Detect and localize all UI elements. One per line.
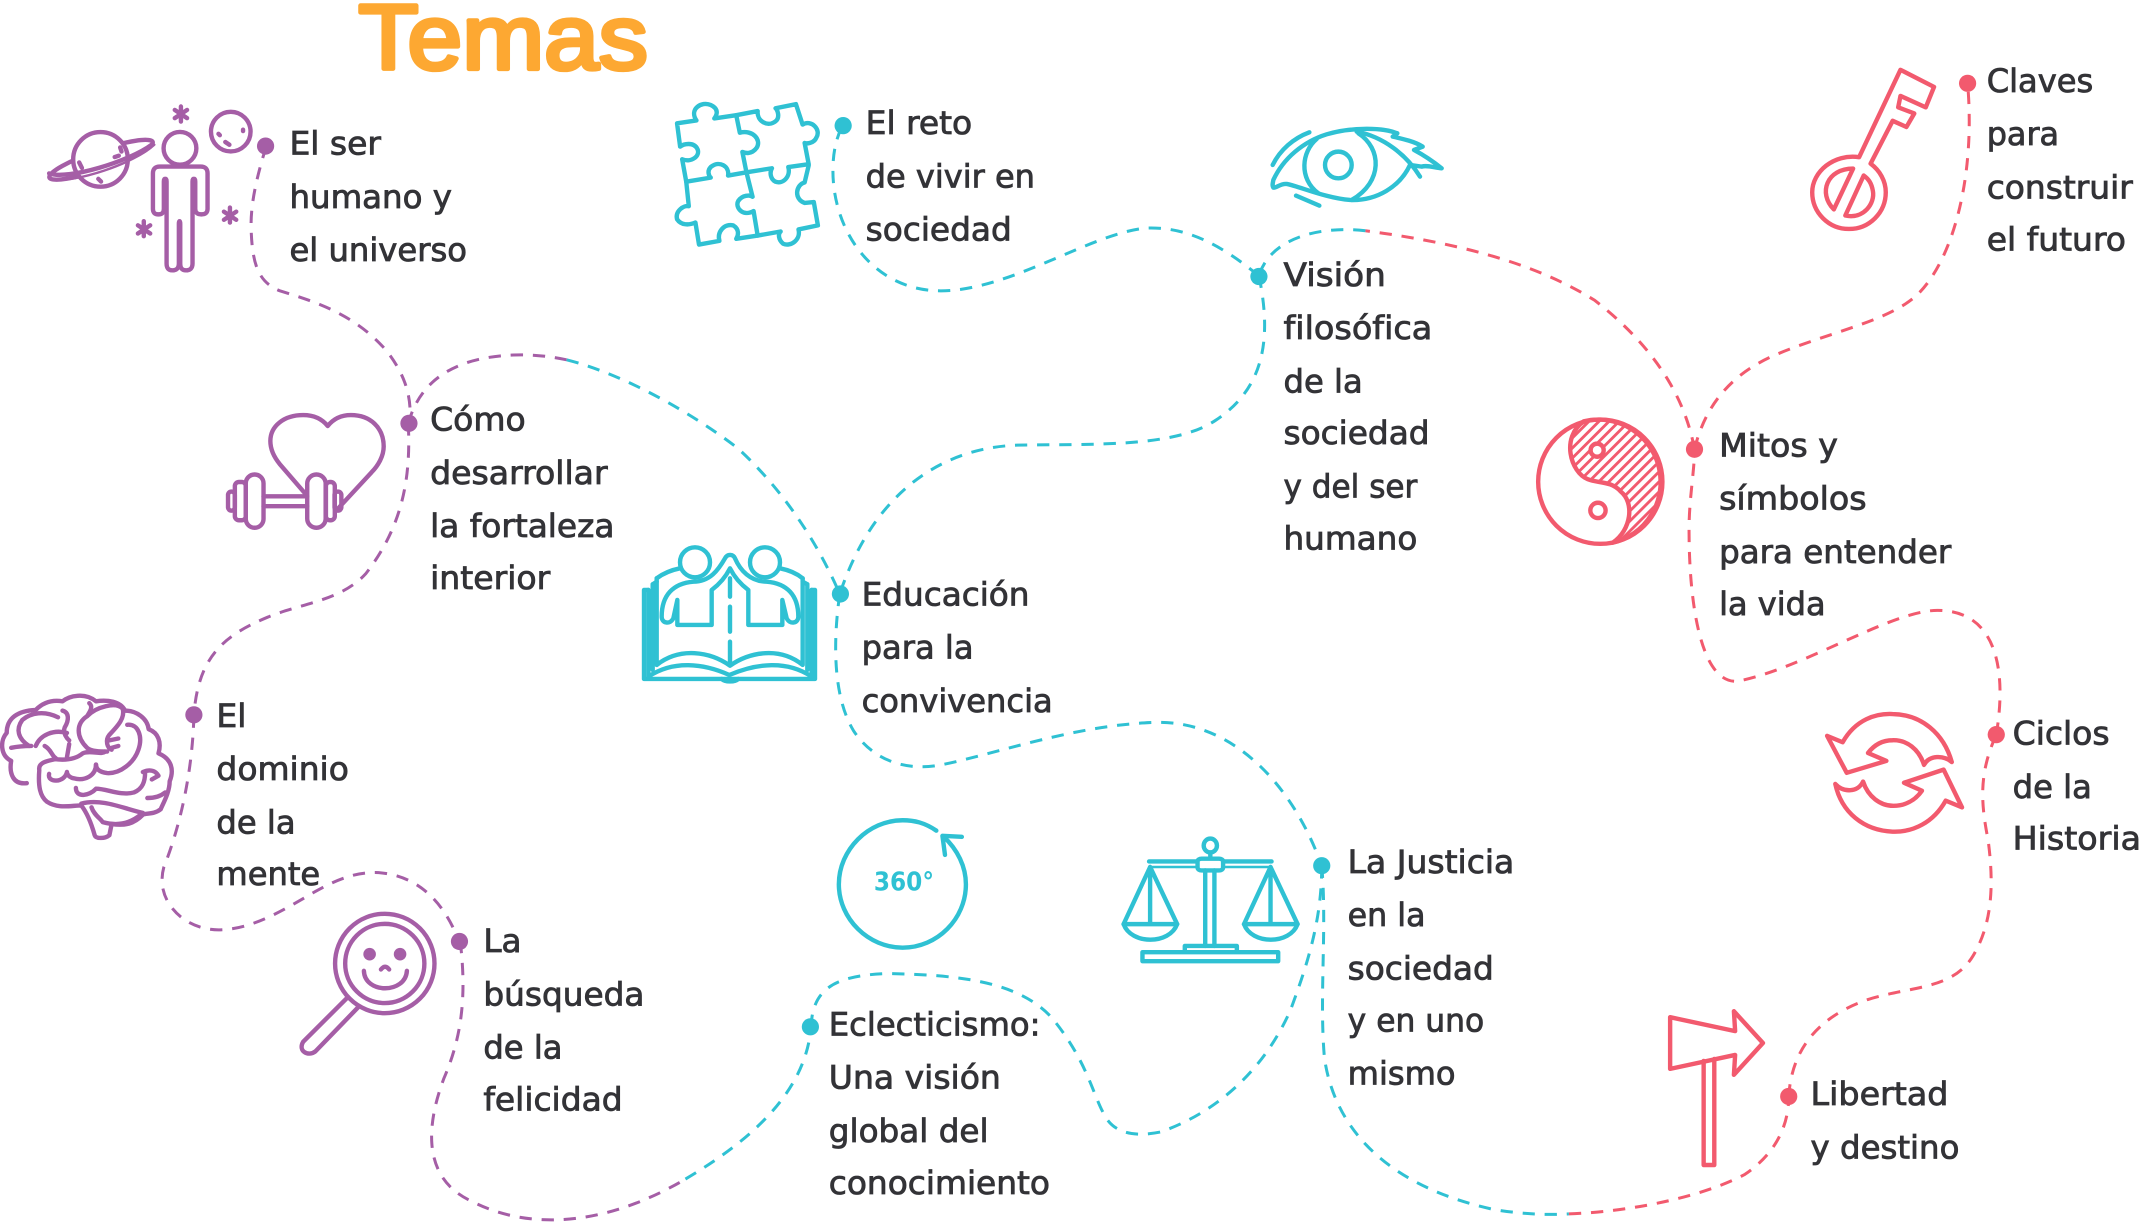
dashed connectors (162, 83, 2000, 1220)
text: Mitos y símbolos para entender la vida: para entender (1719, 533, 1952, 571)
text: Visión filosófica de la sociedad y del ser humano: y del ser (1284, 467, 1418, 505)
text: Educación para la convivencia: convivencia (862, 682, 1053, 720)
text: Cómo desarrollar la fortaleza interior (430, 401, 614, 597)
text: Visión filosófica de la sociedad y del ser humano: filosófica (1284, 309, 1432, 347)
text: El dominio de la mente: de la (216, 803, 296, 841)
text: Eclecticismo: Una visión global del conocimiento: conocimiento (829, 1164, 1050, 1202)
text: Visión filosófica de la sociedad y del ser humano: de la (1284, 362, 1363, 400)
text: Mitos y símbolos para entender la vida: símbolos (1719, 480, 1867, 518)
text: La Justicia en la sociedad y en uno mismo: sociedad (1348, 949, 1494, 987)
text: La Justicia en la sociedad y en uno mismo: en la (1348, 896, 1426, 934)
icon: heart and dumbbell (228, 415, 384, 528)
text: Eclecticismo: Una visión global del conocimiento: global del (829, 1112, 989, 1150)
icon: magnifier with smiling face (302, 914, 434, 1054)
text: Ciclos de la Historia: de la (2013, 768, 2092, 806)
text: Cómo desarrollar la fortaleza interior: la fortaleza (430, 507, 614, 545)
icon: yin yang (1538, 420, 1662, 544)
text: La búsqueda de la felicidad: La (483, 922, 522, 960)
node dot (451, 933, 468, 950)
text: El reto de vivir en sociedad: El reto (866, 104, 972, 142)
node dot (185, 706, 202, 723)
text: El reto de vivir en sociedad: sociedad (866, 211, 1012, 249)
topic: Libertad y destino (1670, 1011, 1959, 1166)
node dot (1686, 441, 1703, 458)
text: Eclecticismo: Una visión global del conocimiento (829, 1005, 1050, 1202)
text: Visión filosófica de la sociedad y del ser humano: humano (1284, 519, 1417, 557)
topic: El reto de vivir en sociedad (677, 104, 1035, 249)
icon: eye (1273, 129, 1442, 206)
icon: person, planet and moon (46, 107, 251, 270)
topic: La búsqueda de la felicidad (302, 914, 644, 1119)
text: El dominio de la mente: El (216, 697, 246, 735)
node dot (400, 415, 418, 432)
text: El ser humano y el universo: el universo (289, 231, 467, 269)
text: Libertad y destino: Libertad (1811, 1075, 1948, 1113)
topic: Mitos y símbolos para entender la vida (1538, 420, 1952, 623)
text: Ciclos de la Historia (2013, 715, 2141, 858)
text: La búsqueda de la felicidad: felicidad (483, 1081, 623, 1119)
topic: Visión filosófica de la sociedad y del ser humano (1250, 129, 1442, 557)
text: Cómo desarrollar la fortaleza interior: desarrollar (430, 454, 608, 492)
icon: brain (2, 696, 172, 838)
topic: Eclecticismo: Una visión global del conocimiento (802, 820, 1050, 1202)
text: La Justicia en la sociedad y en uno mismo: y en uno (1348, 1001, 1484, 1039)
text: La búsqueda de la felicidad (483, 922, 644, 1119)
text: La Justicia en la sociedad y en uno mismo (1348, 843, 1514, 1093)
text: La búsqueda de la felicidad: de la (483, 1029, 563, 1067)
text: El reto de vivir en sociedad (866, 104, 1035, 249)
text: Educación para la convivencia (862, 575, 1053, 720)
text: Mitos y símbolos para entender la vida: la vida (1719, 585, 1826, 623)
text: Libertad y destino (1811, 1075, 1959, 1166)
topic: Ciclos de la Historia (1827, 714, 2141, 858)
text: El dominio de la mente (216, 697, 349, 893)
text: Cómo desarrollar la fortaleza interior: Cómo (430, 401, 526, 439)
text: El reto de vivir en sociedad: de vivir en (866, 157, 1035, 195)
text: La Justicia en la sociedad y en uno mismo: La Justicia (1348, 843, 1514, 881)
text: Libertad y destino: y destino (1811, 1128, 1959, 1166)
text: Ciclos de la Historia: Historia (2013, 820, 2141, 858)
icon: open book with two people (644, 547, 815, 681)
node dot (1959, 75, 1976, 92)
text: Claves para construir el futuro: construir (1987, 168, 2134, 206)
text: Educación para la convivencia: Educación (862, 575, 1030, 613)
topic: El dominio de la mente (2, 696, 349, 893)
icon: cycle arrows (1827, 714, 1962, 832)
node dot (802, 1018, 819, 1035)
icon: 360 degree circle arrow: 360° (874, 867, 934, 897)
icon: key (1812, 70, 1934, 229)
text: El dominio de la mente: mente (216, 855, 320, 893)
icon: 360 degree circle arrow (839, 820, 966, 948)
topic: El ser humano y el universo (46, 107, 467, 270)
text: Claves para construir el futuro: Claves (1987, 62, 2093, 100)
icon: puzzle pieces (677, 104, 818, 245)
text: El dominio de la mente: dominio (216, 750, 349, 788)
topic: Cómo desarrollar la fortaleza interior (228, 401, 614, 597)
node dot (832, 585, 849, 603)
node dot (1313, 857, 1330, 874)
text: El ser humano y el universo: humano y (289, 178, 452, 216)
node dot (1988, 726, 2005, 743)
text: Claves para construir el futuro (1987, 62, 2134, 258)
node dot (835, 117, 852, 134)
topic: Educación para la convivencia (644, 547, 1053, 720)
text: El ser humano y el universo: El ser (289, 125, 382, 163)
text: La Justicia en la sociedad y en uno mismo: mismo (1348, 1055, 1456, 1093)
icon: balance scales (1124, 839, 1298, 961)
node dot (257, 138, 274, 155)
text: Eclecticismo: Una visión global del conocimiento: Una visión (829, 1059, 1001, 1097)
node dot (1250, 268, 1268, 285)
topic: Claves para construir el futuro (1812, 62, 2134, 258)
text: Claves para construir el futuro: el futuro (1987, 220, 2126, 258)
text: Mitos y símbolos para entender la vida (1719, 426, 1952, 623)
text: Mitos y símbolos para entender la vida: Mitos y (1719, 426, 1838, 464)
text: Visión filosófica de la sociedad y del ser humano: sociedad (1284, 414, 1430, 452)
text: La búsqueda de la felicidad: búsqueda (483, 975, 644, 1013)
text: Visión filosófica de la sociedad y del ser humano: Visión (1284, 256, 1386, 294)
topic: La Justicia en la sociedad y en uno mismo (1124, 839, 1514, 1093)
text: El ser humano y el universo (289, 125, 467, 269)
text: Visión filosófica de la sociedad y del ser humano (1284, 256, 1432, 557)
text: Ciclos de la Historia: Ciclos (2013, 715, 2110, 753)
text: Cómo desarrollar la fortaleza interior: interior (430, 559, 551, 597)
text: Claves para construir el futuro: para (1987, 115, 2059, 153)
text: Eclecticismo: Una visión global del conocimiento: Eclecticismo: (829, 1005, 1040, 1043)
icon: arrow signpost (1670, 1011, 1763, 1165)
node dot (1780, 1088, 1797, 1105)
text: Educación para la convivencia: para la (862, 629, 974, 667)
